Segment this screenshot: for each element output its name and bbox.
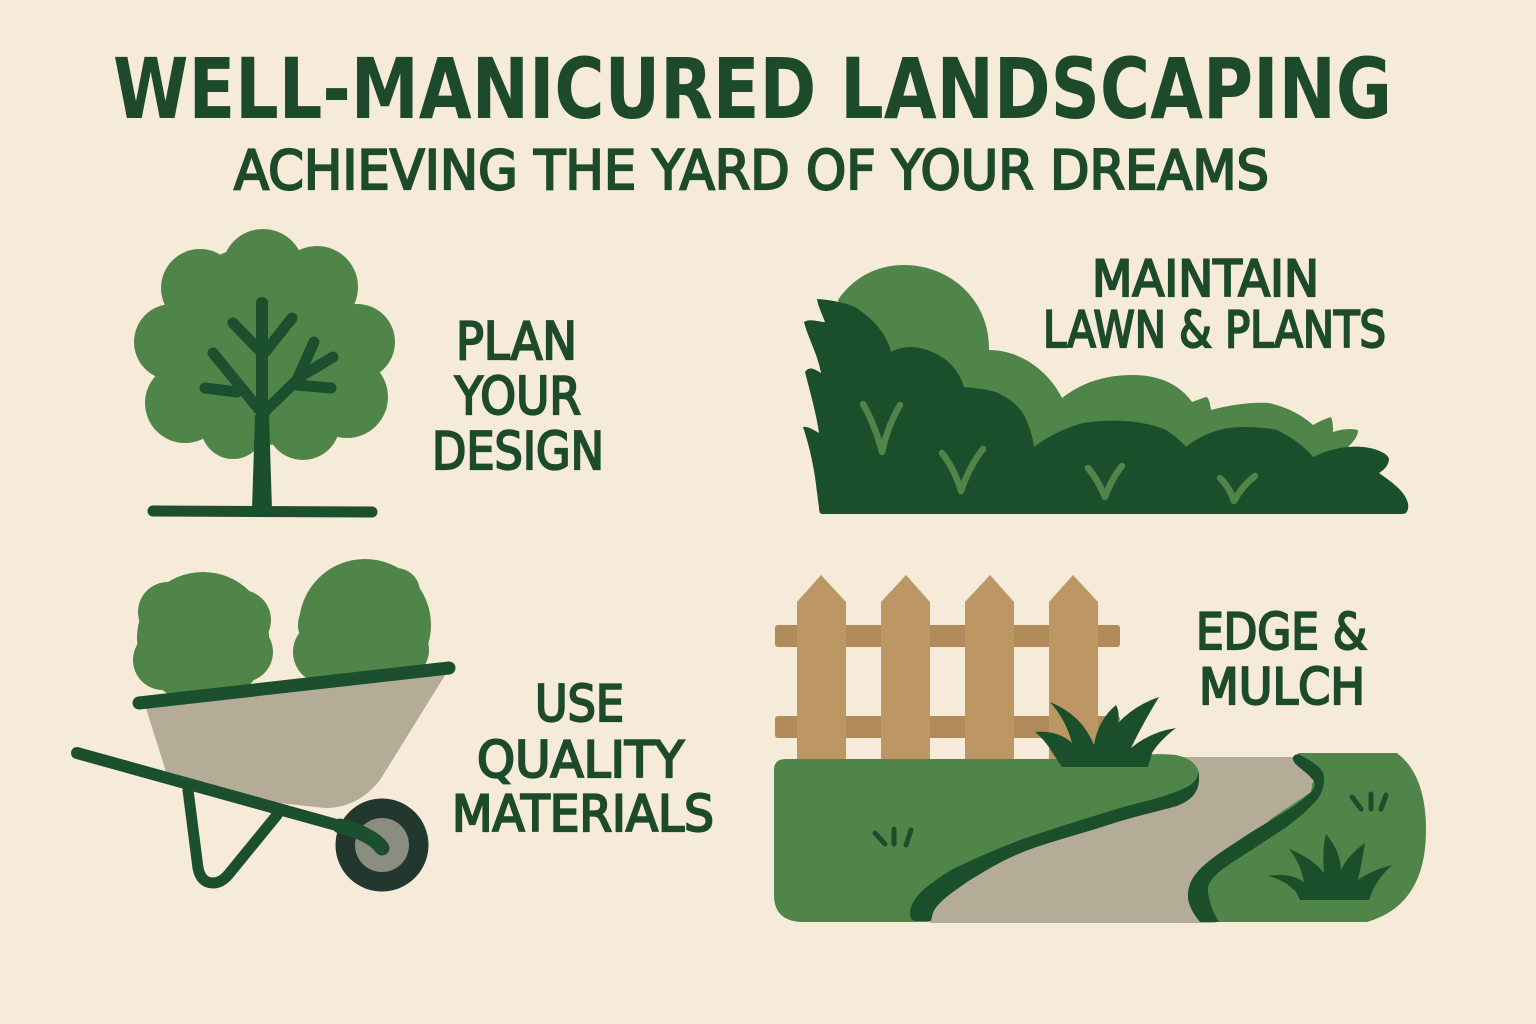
left lawn edge	[910, 770, 1199, 921]
label: maintain lawn and plants: MAINTAIN	[1092, 250, 1319, 308]
label: use quality materials: QUALITY	[477, 731, 684, 789]
icon: grass tuft bottom right	[1268, 834, 1392, 900]
icon: lawn with path	[774, 697, 1426, 923]
label: use quality materials: USE	[535, 675, 624, 733]
icon: grass marks	[875, 794, 1386, 845]
label: edge and mulch: MULCH	[1199, 658, 1365, 716]
left lawn	[774, 754, 1199, 922]
label: maintain lawn and plants	[1043, 250, 1386, 359]
label: plan your design: YOUR	[454, 367, 581, 427]
label: edge and mulch	[1196, 603, 1367, 716]
subtitle: ACHIEVING THE YARD OF YOUR DREAMS	[234, 139, 1269, 202]
right lawn	[1188, 753, 1426, 922]
icon: shrubs	[803, 265, 1408, 514]
right path edge fill	[1170, 757, 1313, 923]
icon: tree	[134, 229, 395, 512]
label: maintain lawn and plants: LAWN & PLANTS	[1043, 301, 1386, 359]
label: edge and mulch: EDGE &	[1196, 603, 1367, 661]
gray path	[920, 757, 1296, 923]
label: use quality materials	[452, 675, 714, 843]
label: plan your design: PLAN	[456, 312, 577, 372]
label: plan your design: DESIGN	[432, 422, 604, 482]
right lawn edge	[1188, 754, 1324, 922]
icon: fence	[775, 575, 1120, 762]
icon: wheelbarrow with shrubs	[77, 559, 449, 892]
icon: grass tuft on lawn edge	[1035, 697, 1176, 767]
label: use quality materials: MATERIALS	[452, 785, 714, 843]
label: plan your design	[432, 312, 604, 482]
